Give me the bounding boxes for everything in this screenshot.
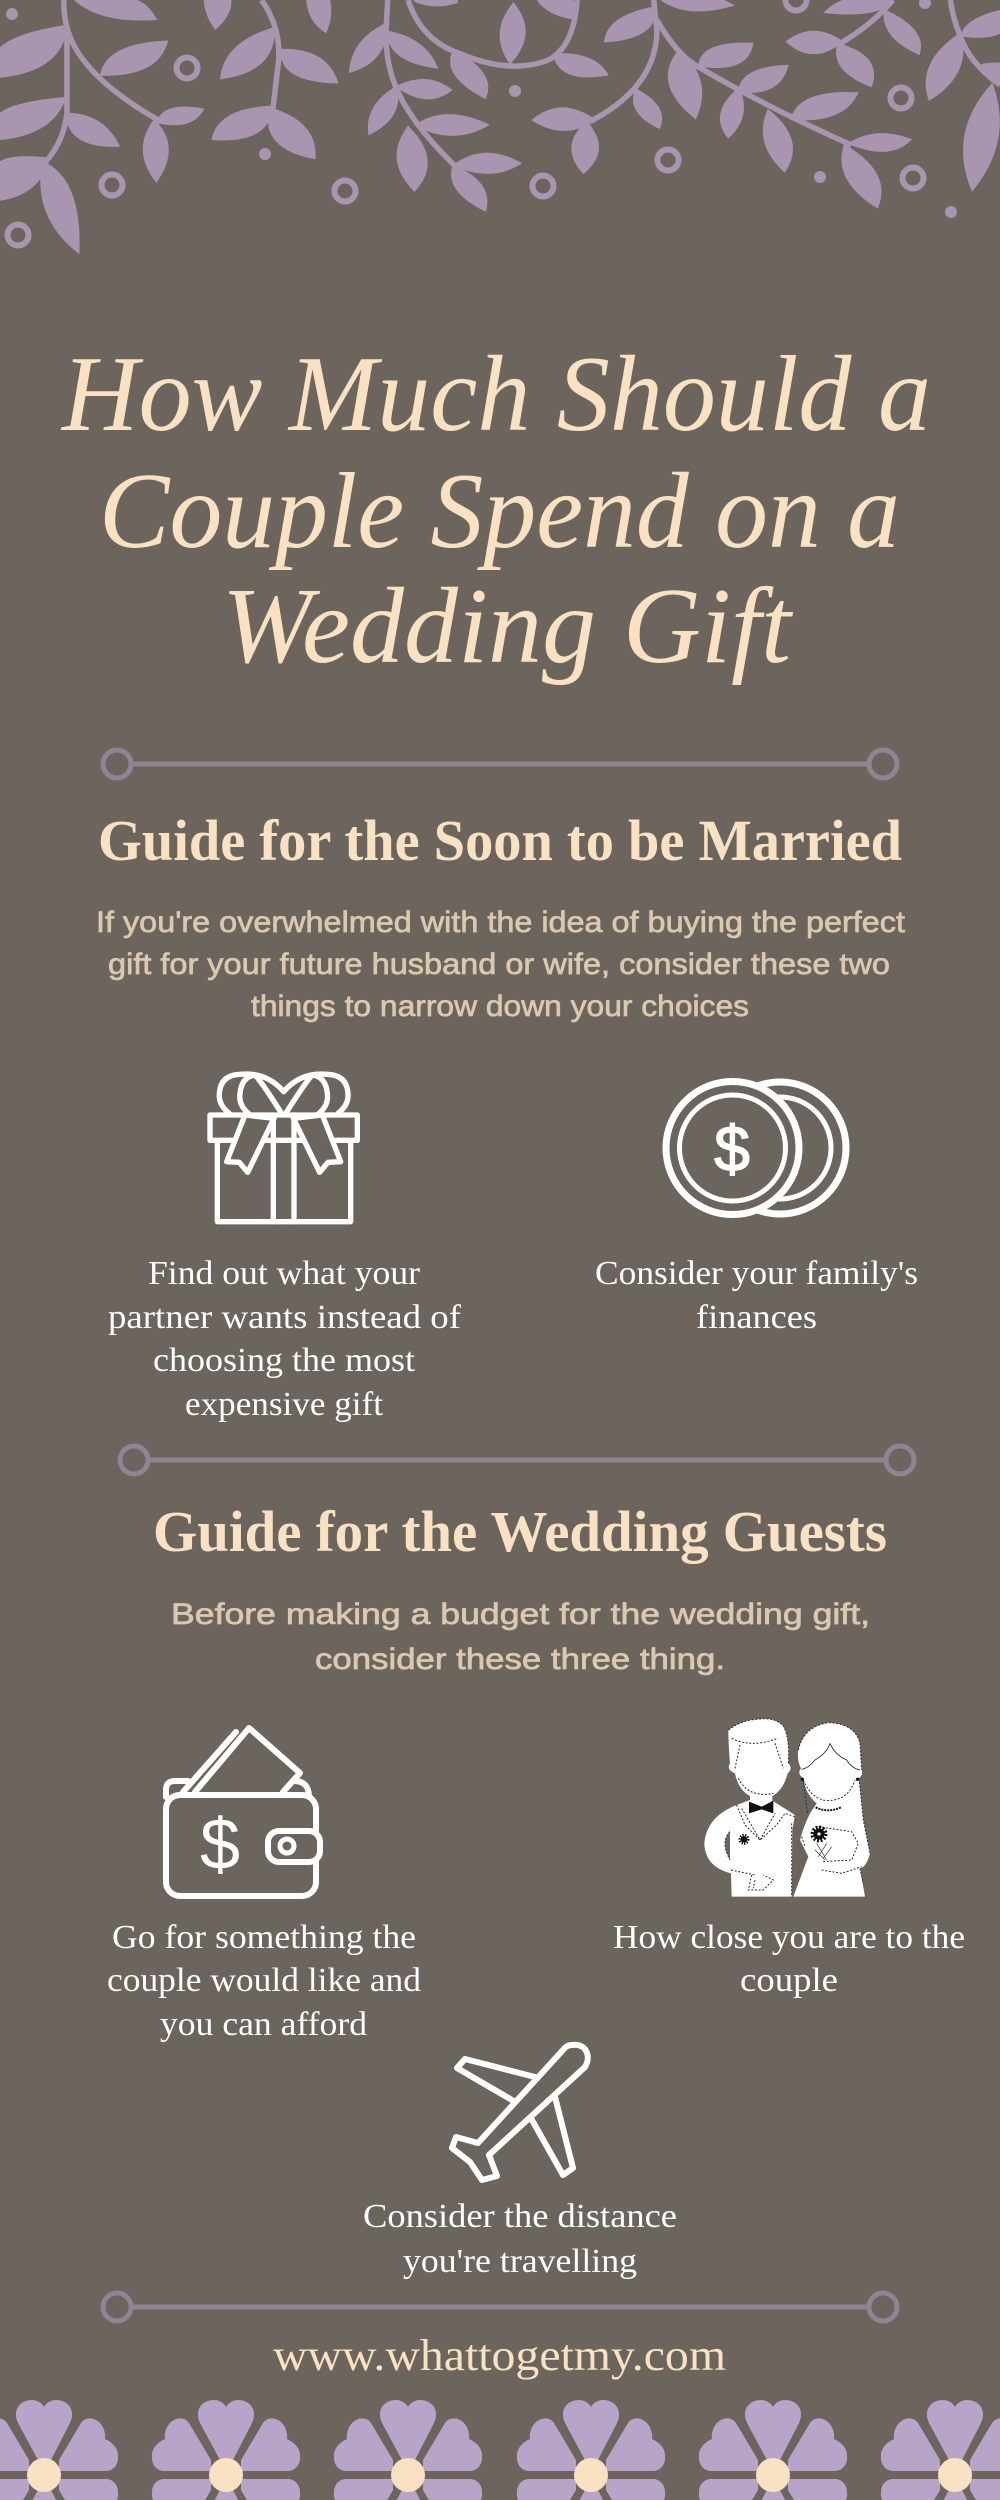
caption: go for something: couple would like and [107, 1962, 421, 1999]
caption: find out what your partner wants: choosing the most [153, 1342, 416, 1379]
icon: gift box [210, 1074, 357, 1222]
intro paragraph: things to narrow down your choices [251, 990, 749, 1023]
vine leaves [0, 0, 1000, 251]
title: Couple Spend on a [99, 452, 900, 571]
caption: go for something [107, 1919, 421, 2043]
intro paragraph: gift for your future husband or wife, consider these two [108, 948, 890, 981]
title: Wedding Gift [222, 567, 794, 686]
divider [103, 2293, 897, 2321]
caption: consider your family's finances [595, 1255, 918, 1336]
caption: go for something: Go for something the [112, 1919, 416, 1956]
guests paragraph: Before making a budget for the wedding gift, [171, 1598, 870, 1631]
flower border [0, 2400, 1000, 2500]
website url: www.whattogetmy.com [273, 2331, 726, 2380]
intro paragraph: If you're overwhelmed with the idea of buying the perfect [96, 906, 906, 939]
caption: how close you are [613, 1919, 965, 1999]
guests paragraph [171, 1598, 870, 1676]
caption: find out what your partner wants: partner wants instead of [108, 1299, 462, 1336]
caption: how close you are: couple [740, 1962, 838, 1999]
heading: guide for the soon to be married: Guide for the Soon to be Married [98, 808, 902, 873]
caption: consider the distance [363, 2198, 677, 2280]
icon: airplane [452, 2045, 588, 2180]
caption: go for something: you can afford [160, 2006, 367, 2043]
guests paragraph: consider these three thing. [315, 1643, 725, 1676]
icon: coins [666, 1082, 846, 1214]
icon: wallet: $ [200, 1805, 240, 1885]
divider [103, 750, 897, 778]
bride [793, 1723, 870, 1897]
caption: consider the distance: Consider the distance [363, 2198, 677, 2235]
heading: guide for the wedding guests: Guide for the Wedding Guests [153, 1499, 887, 1564]
icon: bride and groom [704, 1719, 870, 1897]
icon: coins: $ [714, 1113, 750, 1185]
vine stems [48, 0, 1000, 165]
caption: find out what your partner wants: expensive gift [185, 1386, 384, 1423]
rings and dots [6, 0, 957, 246]
caption: consider your family's finances: Consider your family's [595, 1255, 918, 1292]
floral vine decoration [0, 0, 1000, 251]
intro paragraph [96, 906, 906, 1023]
divider [120, 1446, 914, 1474]
caption: find out what your partner wants: Find out what your [148, 1255, 421, 1292]
caption: how close you are: How close you are to the [613, 1919, 965, 1956]
title: How Much Should a [60, 335, 931, 454]
caption: consider the distance: you're travelling [403, 2243, 637, 2280]
groom [704, 1719, 795, 1897]
caption: consider your family's finances: finances [696, 1299, 817, 1336]
caption: find out what your partner wants [108, 1255, 462, 1423]
icon: wallet [166, 1728, 320, 1896]
title [60, 335, 931, 686]
